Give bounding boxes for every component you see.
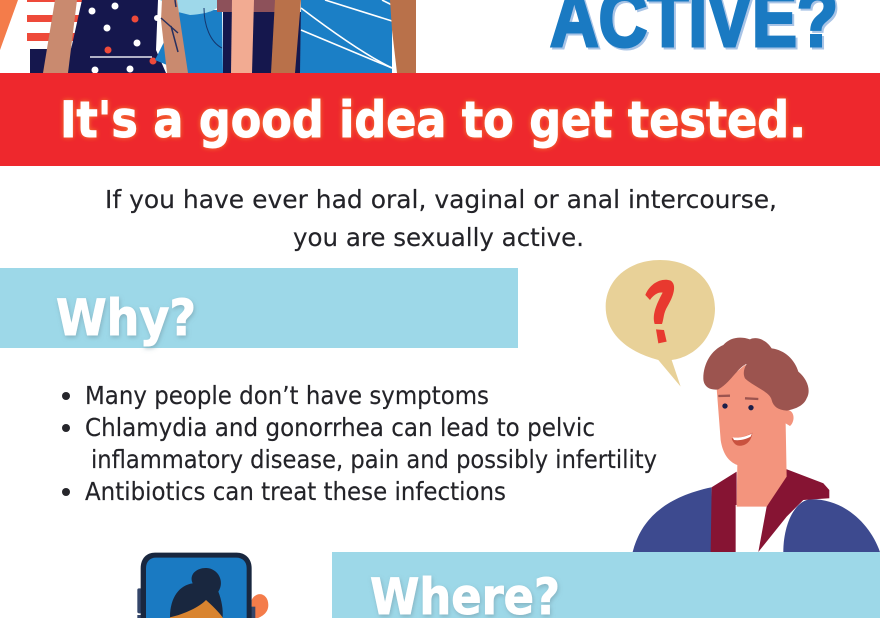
intro text [105,185,777,252]
banner: get tested [0,73,880,166]
list: why bullets [62,381,657,506]
list: why bullets: Chlamydia and gonorrhea can lead to pelvic [85,413,595,442]
icon: phone with telehealth doctor [137,553,268,618]
intro text: you are sexually active. [293,223,584,252]
panel: where heading [332,552,880,618]
panel: why heading [0,268,518,348]
list: why bullets: Antibiotics can treat these infections [85,477,506,506]
intro text: If you have ever had oral, vaginal or anal intercourse, [105,185,777,214]
icon: speech bubble with question mark [606,260,715,387]
banner: get tested: It's a good idea to get tested. [60,91,806,149]
panel: why heading: Why? [56,289,196,347]
illustration: group of people cropped at the legs [0,0,416,74]
list: why bullets: inflammatory disease, pain and possibly infertility [91,445,657,474]
list: why bullets: Many people don’t have symptoms [85,381,489,410]
illustration: smiling man in hoodie [633,338,880,552]
